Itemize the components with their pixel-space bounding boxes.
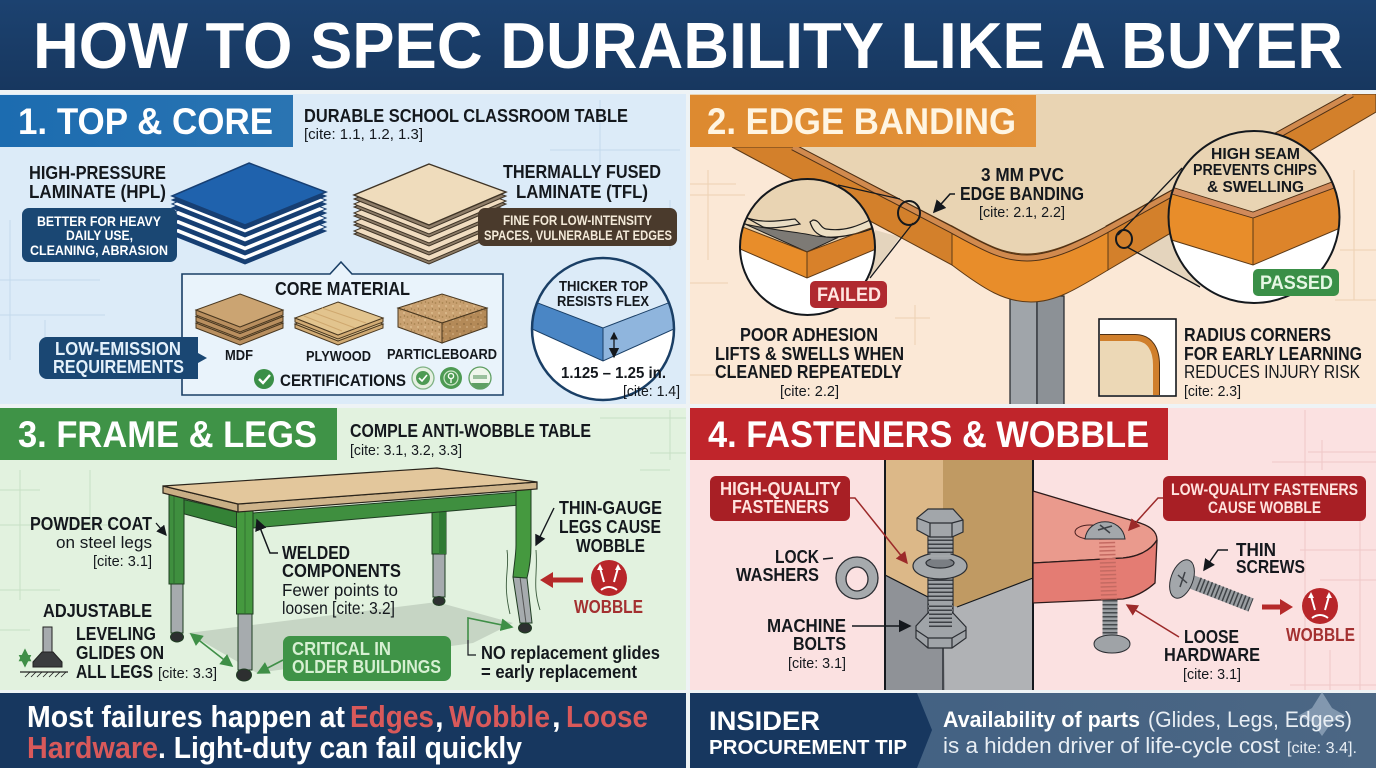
icon: wobble result: WOBBLE bbox=[1286, 625, 1355, 645]
subheading: anti-wobble table: [cite: 3.1, 3.2, 3.3] bbox=[350, 442, 462, 459]
label: welded components: loosen [cite: 3.2] bbox=[282, 598, 395, 618]
footer: insider procurement tip: Availability of parts bbox=[943, 707, 1140, 732]
label: lock washers: LOCK bbox=[775, 547, 819, 567]
illustration: classroom table bbox=[163, 468, 537, 681]
footer: key failures: Wobble bbox=[449, 699, 550, 734]
badge: passed bbox=[1253, 269, 1339, 296]
callout: high-quality fasteners bbox=[710, 476, 907, 563]
callout: low-emission requirements: REQUIREMENTS bbox=[53, 357, 184, 377]
label: HPL bbox=[29, 163, 166, 202]
footer: key failures bbox=[0, 693, 686, 768]
badge: failed: FAILED bbox=[817, 285, 881, 306]
label: adjustable leveling glides bbox=[43, 601, 217, 682]
callout: critical in older buildings: CRITICAL IN bbox=[292, 639, 391, 659]
wobble motion lines bbox=[506, 550, 540, 614]
label: PVC edge banding: [cite: 2.1, 2.2] bbox=[979, 204, 1065, 221]
inset: passed edge bbox=[1116, 125, 1345, 303]
footer: key failures: Edges bbox=[350, 699, 434, 734]
subheading: anti-wobble table: COMPLE ANTI-WOBBLE TABLE bbox=[350, 421, 591, 441]
callout: low-quality fasteners: CAUSE WOBBLE bbox=[1208, 498, 1321, 517]
label: HPL: LAMINATE (HPL) bbox=[29, 182, 166, 202]
label: machine bolts bbox=[767, 616, 910, 672]
text: poor adhesion bbox=[715, 325, 904, 400]
inset: thicker top: RESISTS FLEX bbox=[557, 293, 649, 310]
callout: TFL limitation bbox=[478, 208, 677, 246]
label: thin screws: SCREWS bbox=[1236, 557, 1305, 577]
footer: key failures: , bbox=[435, 699, 444, 734]
icon: thin screw bbox=[1165, 556, 1251, 605]
label: PVC edge banding bbox=[934, 165, 1084, 221]
apron bbox=[177, 492, 520, 528]
callout: TFL limitation: FINE FOR LOW-INTENSITY bbox=[503, 212, 653, 228]
icon: wobble result bbox=[1262, 588, 1355, 645]
label: machine bolts: [cite: 3.1] bbox=[788, 655, 846, 672]
core labels: MDF bbox=[225, 347, 253, 364]
callout: HPL benefit: CLEANING, ABRASION bbox=[30, 242, 168, 258]
label: thin-gauge legs: LEGS CAUSE bbox=[559, 517, 661, 537]
label: thin screws: THIN bbox=[1236, 540, 1276, 560]
icon: MDF bbox=[196, 294, 283, 345]
label: TFL: LAMINATE (TFL) bbox=[516, 182, 648, 202]
callout: critical in older buildings bbox=[258, 636, 451, 681]
icon: particleboard bbox=[398, 294, 487, 343]
orange band bbox=[732, 94, 1376, 302]
label: adjustable leveling glides: [cite: 3.3] bbox=[158, 665, 217, 682]
inset: thicker top: [cite: 1.4] bbox=[623, 383, 680, 400]
back leg bbox=[432, 505, 446, 606]
footer: key failures: Most failures happen at bbox=[27, 699, 345, 734]
label: no replacement glides: NO replacement glides bbox=[481, 643, 660, 663]
subheading: durable table: [cite: 1.1, 1.2, 1.3] bbox=[304, 126, 423, 143]
label: adjustable leveling glides: GLIDES ON bbox=[76, 643, 164, 663]
certifications row: CERTIFICATIONS bbox=[280, 371, 406, 390]
seam strip bbox=[793, 94, 1352, 258]
heading: frame and legs: 3. FRAME & LEGS bbox=[18, 414, 317, 455]
text: poor adhesion: [cite: 2.2] bbox=[780, 383, 839, 400]
heading: top and core: 1. TOP & CORE bbox=[18, 101, 273, 142]
panel: fasteners and wobble bbox=[690, 408, 1376, 690]
tabletop surface bbox=[690, 94, 1348, 254]
illustration: table edge with banding bbox=[690, 94, 1376, 406]
core labels: PLYWOOD bbox=[306, 348, 371, 365]
label: welded components: COMPONENTS bbox=[282, 561, 401, 581]
panel: top and core bbox=[0, 94, 686, 404]
footer: insider procurement tip: is a hidden driver of life-cycle cost bbox=[943, 733, 1280, 758]
icon: HPL laminate stack bbox=[172, 163, 326, 264]
core labels bbox=[225, 346, 497, 365]
arrow: glide span bbox=[191, 634, 232, 666]
label: lock washers: WASHERS bbox=[736, 565, 819, 585]
illustration: post with bolt bbox=[885, 460, 1033, 690]
illustration: bracket with loose screw bbox=[1033, 491, 1157, 653]
label: loose hardware: HARDWARE bbox=[1164, 645, 1260, 665]
text: radius corners bbox=[1184, 325, 1362, 400]
callout: low-quality fasteners bbox=[1129, 476, 1366, 530]
text: poor adhesion: LIFTS & SWELLS WHEN bbox=[715, 344, 904, 364]
panel: frame and legs bbox=[0, 408, 686, 690]
subheading: durable table: DURABLE SCHOOL CLASSROOM TABLE bbox=[304, 106, 628, 126]
title banner: HOW TO SPEC DURABILITY LIKE A BUYER bbox=[33, 9, 1343, 82]
loose screw bbox=[1085, 522, 1130, 653]
front leg bbox=[236, 510, 253, 681]
icon: TFL laminate stack bbox=[354, 164, 506, 264]
icon: plywood bbox=[295, 302, 383, 345]
footer: insider procurement tip: INSIDER bbox=[709, 706, 820, 736]
floor shadow bbox=[188, 602, 513, 673]
label: thin-gauge legs bbox=[536, 498, 662, 556]
footer: insider procurement tip: [cite: 3.4]. bbox=[1287, 740, 1357, 757]
label: HPL: HIGH-PRESSURE bbox=[29, 163, 166, 183]
footer: key failures: , bbox=[552, 699, 561, 734]
label: PVC edge banding: 3 MM PVC bbox=[981, 165, 1064, 185]
inset: thicker top bbox=[530, 255, 680, 400]
label: no replacement glides: = early replacement bbox=[481, 662, 637, 682]
label: welded components bbox=[257, 520, 401, 618]
footer: insider procurement tip bbox=[690, 692, 1376, 768]
connector wedge shading bbox=[870, 230, 1200, 287]
label: powder coat: [cite: 3.1] bbox=[93, 553, 152, 570]
footer: key failures: Hardware bbox=[27, 730, 158, 765]
heading: edge banding: 2. EDGE BANDING bbox=[707, 101, 1016, 142]
label: adjustable leveling glides: ADJUSTABLE bbox=[43, 601, 152, 621]
label: powder coat: on steel legs bbox=[56, 533, 152, 552]
label: welded components: WELDED bbox=[282, 543, 350, 563]
label: loose hardware: [cite: 3.1] bbox=[1183, 666, 1241, 683]
badge: failed bbox=[810, 281, 887, 308]
panel: core material: CORE MATERIAL bbox=[275, 279, 410, 299]
callout: high-quality fasteners: FASTENERS bbox=[732, 497, 829, 517]
label: thin-gauge legs: THIN-GAUGE bbox=[559, 498, 662, 518]
leg bbox=[1010, 296, 1064, 406]
panel: core material bbox=[182, 262, 503, 395]
callout: HPL benefit bbox=[22, 208, 177, 262]
label: loose hardware: LOOSE bbox=[1184, 627, 1239, 647]
label: thin-gauge legs: WOBBLE bbox=[576, 536, 645, 556]
label: machine bolts: BOLTS bbox=[793, 634, 846, 654]
left rear leg bbox=[169, 495, 184, 642]
bent thin-gauge leg bbox=[513, 489, 532, 633]
inset: passed edge: & SWELLING bbox=[1207, 179, 1304, 196]
certifications row bbox=[254, 367, 491, 390]
label: adjustable leveling glides: ALL LEGS bbox=[76, 662, 153, 682]
icon: wobble force arrow bbox=[540, 560, 643, 617]
icon: leveling glide bbox=[20, 627, 68, 677]
text: poor adhesion: CLEANED REPEATEDLY bbox=[715, 362, 902, 382]
footer: key failures: . Light-duty can fail quickly bbox=[158, 730, 523, 765]
callout: low-emission requirements bbox=[39, 337, 207, 379]
callout: HPL benefit: DAILY USE, bbox=[66, 227, 133, 243]
icon: wobble force arrow: WOBBLE bbox=[574, 597, 643, 617]
inset: thicker top: 1.125 – 1.25 in. bbox=[561, 365, 666, 382]
label: adjustable leveling glides: LEVELING bbox=[76, 624, 156, 644]
label: thin screws bbox=[1204, 540, 1305, 577]
label: TFL: THERMALLY FUSED bbox=[503, 162, 661, 182]
core labels: PARTICLEBOARD bbox=[387, 346, 497, 363]
footer: insider procurement tip: (Glides, Legs, Edges) bbox=[1148, 707, 1352, 732]
heading: fasteners and wobble: 4. FASTENERS & WOBBLE bbox=[708, 414, 1149, 455]
badge: passed: PASSED bbox=[1260, 273, 1333, 294]
label: lock washers bbox=[736, 547, 878, 599]
label: powder coat bbox=[30, 514, 166, 570]
footer: key failures: Loose bbox=[566, 699, 648, 734]
callout: HPL benefit: BETTER FOR HEAVY bbox=[37, 213, 162, 229]
inset: passed edge: HIGH SEAM bbox=[1211, 146, 1300, 163]
inset: failed edge bbox=[735, 175, 920, 315]
text: poor adhesion: POOR ADHESION bbox=[740, 325, 878, 345]
text: radius corners: RADIUS CORNERS bbox=[1184, 325, 1331, 345]
footer: insider procurement tip: PROCUREMENT TIP bbox=[709, 737, 907, 759]
inset: passed edge: PREVENTS CHIPS bbox=[1193, 162, 1317, 179]
label: powder coat: POWDER COAT bbox=[30, 514, 152, 534]
label: machine bolts: MACHINE bbox=[767, 616, 846, 636]
text: radius corners: [cite: 2.3] bbox=[1184, 383, 1241, 400]
label: TFL bbox=[503, 162, 661, 202]
label: loose hardware bbox=[1127, 605, 1260, 683]
label: PVC edge banding: EDGE BANDING bbox=[960, 184, 1084, 204]
callout: low-emission requirements: LOW-EMISSION bbox=[55, 339, 181, 359]
table top bbox=[163, 468, 537, 512]
icon: radius corner bbox=[1095, 319, 1176, 400]
label: welded components: Fewer points to bbox=[282, 580, 398, 600]
subheading: anti-wobble table bbox=[350, 421, 591, 459]
inset: thicker top: THICKER TOP bbox=[559, 278, 648, 295]
panel: edge banding bbox=[690, 94, 1376, 406]
callout: critical in older buildings: OLDER BUILDINGS bbox=[292, 657, 441, 677]
subheading: durable table bbox=[304, 106, 628, 143]
label: no replacement glides bbox=[468, 618, 660, 682]
callout: TFL limitation: SPACES, VULNERABLE AT EDGES bbox=[484, 227, 672, 243]
machine bolt bbox=[913, 509, 967, 648]
callout: high-quality fasteners: HIGH-QUALITY bbox=[720, 479, 841, 499]
